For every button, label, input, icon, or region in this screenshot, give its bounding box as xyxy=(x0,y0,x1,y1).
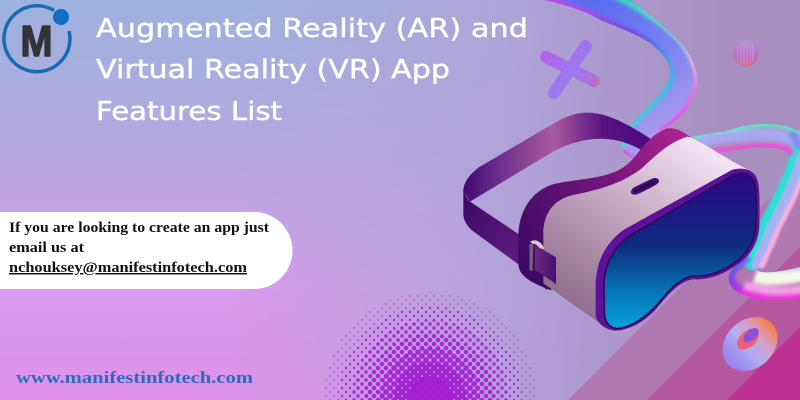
headset button xyxy=(631,178,659,195)
title xyxy=(96,14,528,127)
3D tube: right loop xyxy=(690,122,800,300)
website url: www.manifestinfotech.com xyxy=(16,368,253,387)
headset strap xyxy=(463,113,650,290)
headset body xyxy=(543,137,748,323)
callout pill xyxy=(0,212,292,289)
logo: M xyxy=(20,17,52,66)
title: Augmented Reality (AR) and xyxy=(96,14,528,44)
callout text: If you are looking to create an app just xyxy=(9,220,269,236)
strap buckle xyxy=(529,240,556,284)
3D tube: upper swirl xyxy=(544,0,697,158)
headset side band xyxy=(518,128,690,290)
callout text xyxy=(9,220,269,276)
icon: striped sphere xyxy=(733,40,759,66)
callout text: email us at xyxy=(9,240,84,256)
VR headset xyxy=(463,113,760,331)
halftone dot circle xyxy=(320,290,540,400)
icon: 3D cross xyxy=(546,46,594,93)
headset front rim xyxy=(596,169,760,331)
icon: 3D donut xyxy=(712,306,788,382)
callout text: nchouksey@manifestinfotech.com xyxy=(9,260,247,276)
headset screen xyxy=(604,173,756,329)
title: Virtual Reality (VR) App xyxy=(96,55,450,85)
3D tube: right loop descending section xyxy=(752,150,800,266)
logo xyxy=(4,6,70,72)
diagonal stripes xyxy=(568,168,800,400)
title: Features List xyxy=(96,97,282,127)
